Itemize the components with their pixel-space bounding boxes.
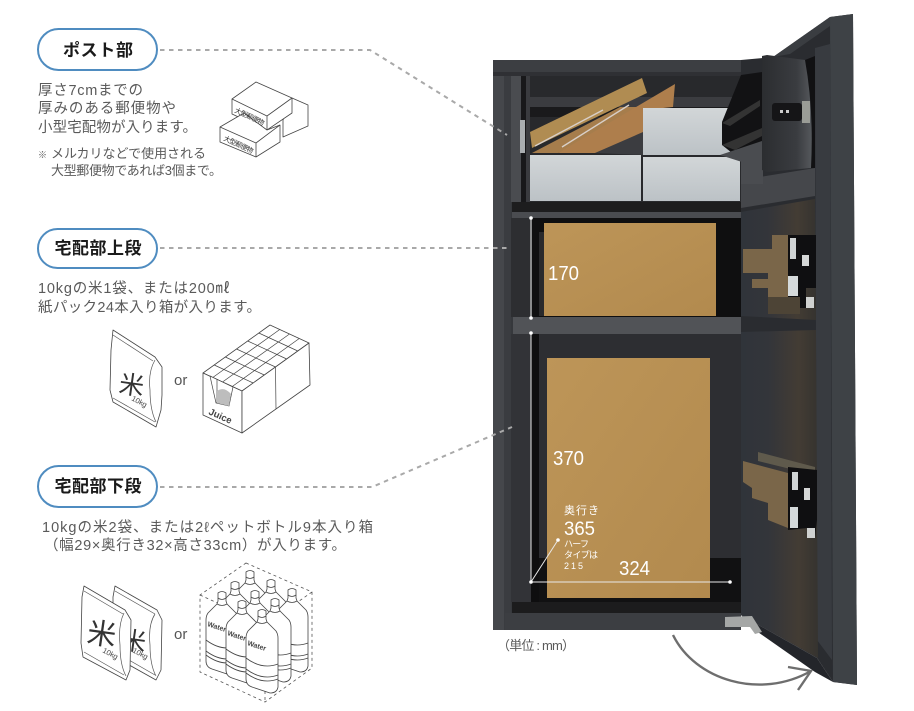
icon: two rice bags [81,586,162,680]
icon: stacked parcels: 大型郵便物 [233,106,266,127]
panel: lower delivery section [38,466,373,702]
heading pill: upper [38,229,157,268]
icon: two rice bags: 10kg [101,646,120,661]
dimension: depth 365: 215 [564,561,583,571]
illustration: open delivery box [493,14,857,685]
post footnote: ※ [38,150,47,160]
heading pill: post [38,29,157,70]
dimension: depth 365: 365 [564,519,595,540]
post compartment [511,76,741,202]
door outer frame [741,14,857,685]
latch [520,120,525,153]
icon: two rice bags: 米 [119,626,148,657]
dimension: 170: 170 [548,263,579,285]
heading pill: post: ポスト部 [63,40,133,60]
post description: 小型宅配物が入ります。 [38,119,197,136]
or label: or [174,372,187,389]
heading pill: lower [38,466,157,507]
or label: or [174,626,187,643]
dimension: depth 365 [564,503,599,571]
connector: lower delivery section [160,427,512,487]
upper description: 10kgの米1袋、または200㎖ [38,280,230,297]
dimension lines [529,216,732,584]
post footnote: 大型郵便物であれば3個まで。 [51,163,222,178]
icon: rice bag: 10kg [130,394,149,409]
cabinet body [493,60,741,630]
arrow: door swing [673,635,811,690]
post description: 厚さ7cmまでの [38,82,143,99]
white boxes [530,108,740,201]
dimension: depth 365: 奥行き [564,503,599,517]
shelf [512,202,741,218]
dimension: depth 365: ハーフ [564,539,589,549]
post description: 厚みのある郵便物や [38,100,176,117]
lower delivery compartment [505,334,741,630]
hinge [725,616,762,634]
door inner: upper panel [741,199,816,320]
door inner: post mechanism [720,55,815,208]
heading pill: upper: 宅配部上段 [54,239,142,258]
icon: water bottle case [200,563,312,702]
icon: two rice bags: 米 [85,616,118,653]
icon: water bottle case: Water [226,630,247,643]
lower description: （幅29×奥行き32×高さ33cm）が入ります。 [44,537,346,554]
panel: post section [38,29,308,178]
icon: water bottle case: Water [206,621,227,634]
icon: two rice bags: 10kg [131,646,150,661]
envelopes [530,78,675,153]
lower description: 10kgの米2袋、または2ℓペットボトル9本入り箱 [42,519,373,536]
unit note: （単位 : mm） [497,638,575,653]
upper description: 紙パック24本入り箱が入ります。 [38,299,261,316]
panel: upper delivery section [38,229,310,433]
icon: rice bag [110,330,162,427]
icon: stacked parcels: 大型郵便物 [222,134,255,155]
icon: juice carton box [203,325,310,433]
icon: rice bag: 米 [117,370,146,401]
icon: juice carton box: Juice [207,407,233,427]
dimension: 324: 324 [619,558,650,580]
dimension: 370: 370 [553,448,584,470]
icon: water bottle case: Water [246,640,267,653]
connector: post section [160,50,507,135]
door inner: lower panel [725,330,833,682]
post footnote: メルカリなどで使用される [51,146,206,161]
heading pill: lower: 宅配部下段 [54,477,142,496]
icon: stacked parcels [220,82,308,157]
dimension: depth 365: タイプは [564,550,598,560]
middle shelf [513,317,741,334]
upper delivery compartment [511,218,741,317]
connector: upper delivery section [160,247,507,249]
